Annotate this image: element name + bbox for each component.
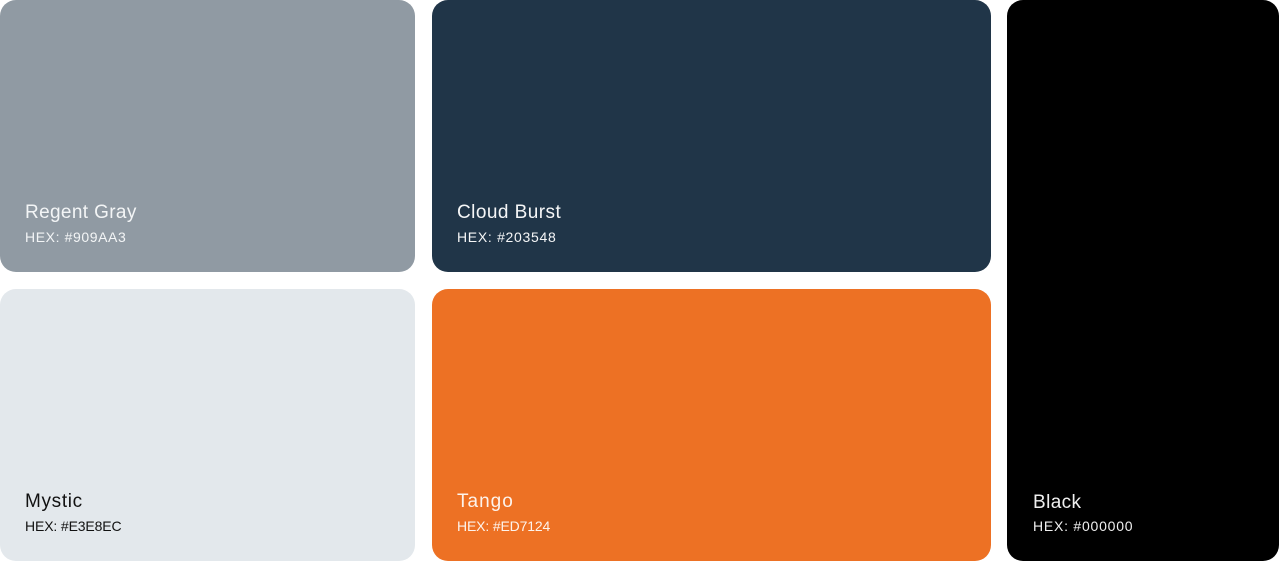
swatch name: Tango: Tango	[457, 491, 514, 512]
panel: Regent Gray swatch	[0, 0, 415, 272]
swatch name: Mystic: Mystic	[25, 491, 83, 512]
hex value: Cloud Burst: HEX: #203548	[457, 229, 556, 245]
panel: Cloud Burst swatch	[432, 0, 991, 272]
panel: Black swatch	[1007, 0, 1279, 561]
swatch name: Black: Black	[1033, 492, 1081, 513]
panel: Tango swatch	[432, 289, 991, 561]
hex value: Regent Gray: HEX: #909AA3	[25, 229, 126, 245]
swatch name: Regent Gray: Regent Gray	[25, 202, 137, 223]
hex value: Black: HEX: #000000	[1033, 518, 1133, 534]
panel: Mystic swatch	[0, 289, 415, 561]
hex value: Mystic: HEX: #E3E8EC	[25, 518, 122, 534]
hex value: Tango: HEX: #ED7124	[457, 518, 550, 534]
swatch name: Cloud Burst: Cloud Burst	[457, 202, 561, 223]
